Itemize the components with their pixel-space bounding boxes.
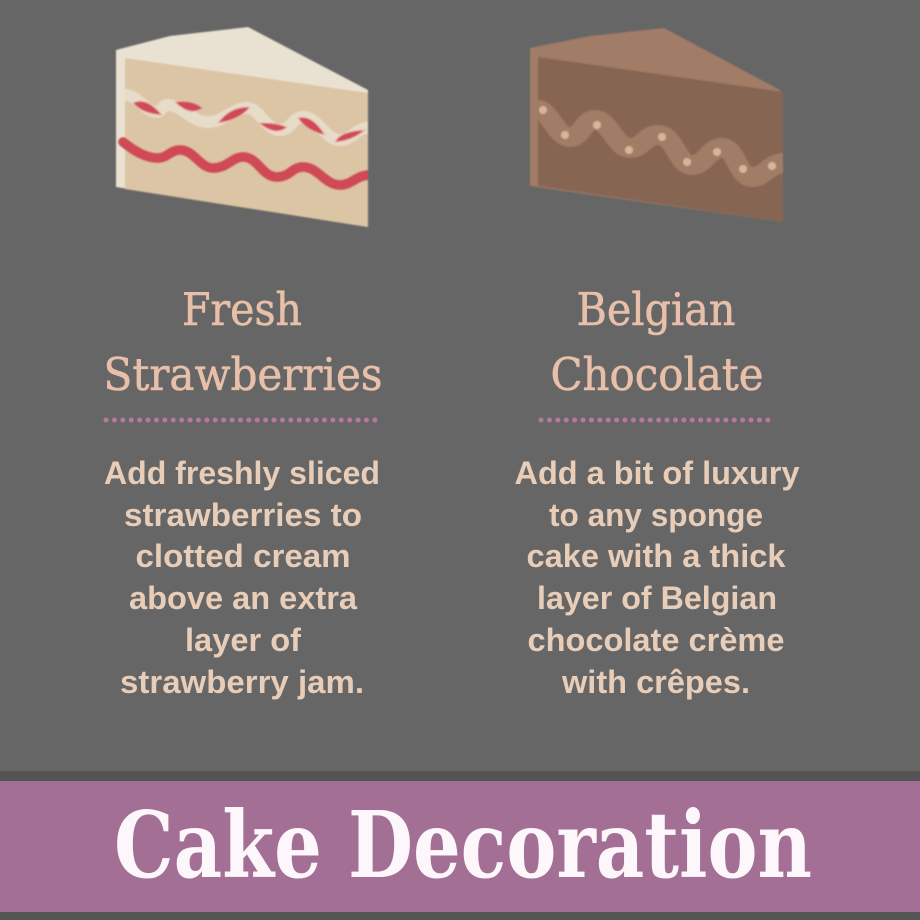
icon: strawberry cake slice [116,27,370,227]
text: chocolate description: to any sponge [549,497,763,533]
text: chocolate description: cake with a thick [526,538,786,574]
text: strawberry description: strawberry jam. [120,664,364,700]
heading: Belgian Chocolate [550,283,764,401]
icon: chocolate cake slice [530,28,785,222]
text: strawberry description: strawberries to [124,497,362,533]
text: chocolate description: chocolate crème [528,622,784,658]
text: strawberry description: Add freshly sliced [104,455,380,491]
text: chocolate description [514,455,800,700]
heading: Fresh Strawberries: Strawberries [104,348,382,401]
text: chocolate description: layer of Belgian [537,580,777,616]
heading: Belgian Chocolate: Belgian [576,283,736,336]
text: strawberry description [104,455,380,700]
heading: Belgian Chocolate: Chocolate [550,348,764,401]
banner: Cake Decoration [0,771,920,920]
text: strawberry description: clotted cream [136,538,350,574]
text: strawberry description: above an extra [129,580,357,616]
text: chocolate description: with crêpes. [561,664,750,700]
heading: Fresh Strawberries: Fresh [182,283,302,336]
text: strawberry description: layer of [185,622,301,658]
text: chocolate description: Add a bit of luxury [514,455,800,491]
heading: Fresh Strawberries [104,283,382,401]
